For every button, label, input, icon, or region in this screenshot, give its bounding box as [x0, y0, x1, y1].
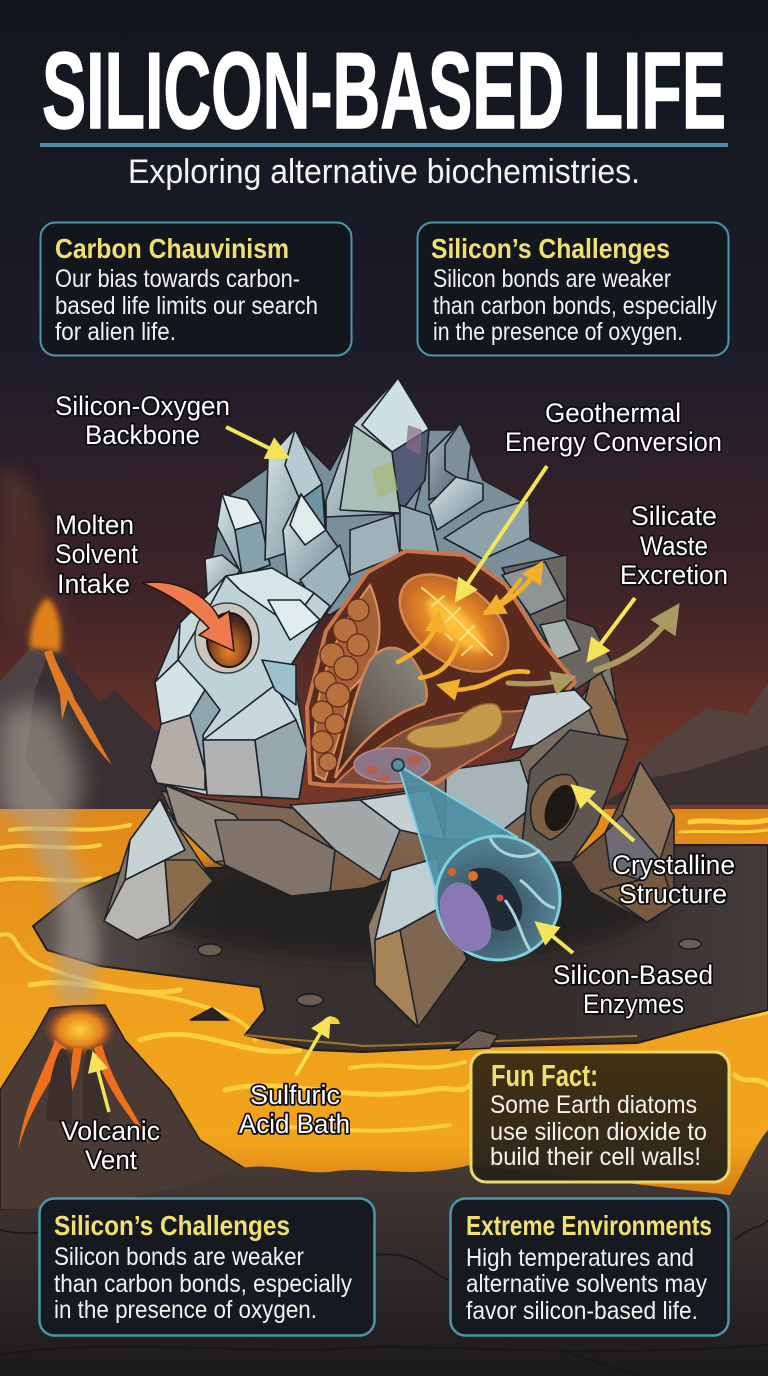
label: Silicon-Based Enzymes: Silicon-Based: [553, 960, 713, 990]
label: Sulfuric Acid Bath: Sulfuric: [250, 1080, 340, 1110]
panel: Fun Fact: Fun Fact:: [491, 1058, 598, 1093]
organ: dark cavity and grey sphere: [335, 648, 427, 778]
front centre leg: [368, 858, 467, 1027]
label: Geothermal Energy Conversion: Geothermal: [545, 398, 681, 428]
panel: Extreme Environments: High temperatures and: [466, 1244, 694, 1272]
label: Molten Solvent Intake: [55, 510, 138, 599]
label: Molten Solvent Intake: Molten: [55, 510, 134, 540]
crystal: front left: [283, 494, 340, 585]
island shadow under creature: [140, 850, 660, 960]
zoom callout pointer: [392, 759, 517, 888]
panel: Extreme Environments: alternative solvents may: [466, 1270, 707, 1298]
arrow: to mitochondrion: [458, 466, 547, 598]
panel: Extreme Environments: favor silicon-based life.: [466, 1297, 698, 1325]
panel: Silicon's Challenges (bottom): Silicon bonds are weaker: [54, 1243, 304, 1271]
organ: lower tissue: [335, 705, 552, 786]
crystal: shoulder right: [444, 500, 530, 559]
arrow: to crystalline structure: [575, 788, 634, 841]
leg: back right: [571, 762, 674, 922]
dark rock island under creature: [33, 845, 768, 1052]
label: Geothermal Energy Conversion: Energy Conversion: [505, 427, 722, 457]
panel: Silicon's Challenges (bottom): in the presence of oxygen.: [54, 1296, 317, 1324]
panel: Carbon Chauvinism: based life limits our search: [55, 292, 318, 320]
crystal mass filler: [207, 385, 613, 690]
label: Crystalline Structure: Crystalline: [612, 850, 735, 880]
background: dark sky: [0, 0, 768, 830]
foreground rock ground: [0, 1130, 768, 1376]
distant erupting volcano and mountains: [0, 598, 768, 809]
lava lake: [0, 809, 768, 1200]
lava streaks: [0, 820, 768, 1131]
label: Silicate Waste Excretion: Silicate: [631, 501, 717, 531]
label: Silicon-Oxygen Backbone: Silicon-Oxygen: [55, 391, 230, 421]
panel: Carbon Chauvinism: [40, 222, 352, 356]
label: Silicon-Oxygen Backbone: Backbone: [85, 420, 200, 450]
label: Silicon-Based Enzymes: [553, 960, 713, 1019]
label: Molten Solvent Intake: Solvent: [55, 539, 138, 569]
organ: glowing mitochondrion: [382, 555, 526, 691]
label: Crystalline Structure: [612, 850, 735, 909]
crystal spikes: [205, 378, 530, 615]
lower body rock: [161, 656, 628, 896]
creature: [104, 378, 674, 1027]
arrow: to enzymes: [539, 925, 573, 953]
island edge highlight: [245, 1035, 637, 1046]
arrow: to waste pore: [590, 598, 635, 658]
arrow: to vent: [94, 1056, 109, 1112]
title underline: [40, 143, 728, 147]
arrow: to intake: [142, 582, 234, 651]
intake ring opening: [195, 603, 259, 673]
crystal: small left: [205, 555, 240, 600]
crystal: tall left: [265, 429, 326, 560]
foreground small volcano: [0, 1004, 300, 1210]
rock strata: [0, 1200, 768, 1376]
small ground rocks: [190, 939, 701, 1050]
label: Volcanic Vent: Vent: [85, 1145, 137, 1175]
panel: Silicon's Challenges (top): [418, 222, 728, 356]
organ: yellow bean: [406, 704, 502, 748]
panel: Fun Fact: [471, 1052, 729, 1182]
panel: Silicon's Challenges (bottom): [40, 1198, 374, 1336]
leg: front left: [104, 799, 213, 940]
crystal: large central: [326, 378, 429, 517]
label: Silicate Waste Excretion: Waste: [640, 531, 708, 561]
panel: Silicon's Challenges (top): than carbon bonds, especially: [433, 292, 717, 320]
label: Sulfuric Acid Bath: [239, 1080, 350, 1139]
panel: Silicon's Challenges (bottom): Silicon’s Challenges: [54, 1210, 290, 1241]
panel: Carbon Chauvinism: Carbon Chauvinism: [55, 233, 289, 264]
crystal: left: [217, 494, 270, 575]
label: Volcanic Vent: Volcanic: [61, 1116, 160, 1146]
organ: segmented tissue: [311, 585, 380, 780]
label: Silicate Waste Excretion: [620, 501, 728, 590]
label: Volcanic Vent: [61, 1116, 160, 1175]
label: Silicon-Oxygen Backbone: [55, 391, 230, 450]
upper rocks behind cutaway: [502, 555, 613, 690]
acid bath droplet: [322, 1016, 340, 1024]
arrow: to backbone: [226, 427, 285, 456]
panel: Extreme Environments: [450, 1198, 728, 1336]
arrow: to acid bath: [296, 1020, 328, 1075]
label: Silicate Waste Excretion: Excretion: [620, 560, 728, 590]
panel: Extreme Environments: Extreme Environments: [466, 1210, 712, 1241]
label: Molten Solvent Intake: Intake: [57, 569, 130, 599]
head crystal mass: [150, 568, 330, 799]
label: Silicon-Based Enzymes: Enzymes: [583, 989, 684, 1019]
panel: Fun Fact: use silicon dioxide to: [490, 1118, 707, 1146]
subtitle: Exploring alternative biochemistries.: [128, 153, 640, 191]
cutaway interior: [307, 551, 575, 787]
distant smoke: [0, 469, 66, 650]
panel: Fun Fact: build their cell walls!: [490, 1143, 701, 1171]
label: Geothermal Energy Conversion: [505, 398, 722, 457]
volcano smoke plume: [0, 703, 98, 1005]
panel: Silicon's Challenges (top): Silicon bonds are weaker: [433, 265, 671, 293]
internal energy flow arrows: [398, 566, 540, 690]
crystal: right low: [429, 477, 483, 530]
panel: Silicon's Challenges (top): Silicon’s Challenges: [431, 233, 670, 264]
shoulder crystal below cutaway: [510, 690, 592, 750]
panel: Carbon Chauvinism: for alien life.: [55, 318, 176, 346]
label: Sulfuric Acid Bath: Acid Bath: [239, 1109, 350, 1139]
crystal: right rear: [429, 423, 471, 500]
waste excretion arrows: [508, 610, 675, 684]
enzyme magnification circle: [436, 836, 560, 960]
panel: Silicon's Challenges (bottom): than carbon bonds, especially: [54, 1270, 352, 1298]
panel: Fun Fact: Some Earth diatoms: [490, 1091, 697, 1119]
label: Crystalline Structure: Structure: [619, 879, 727, 909]
panel: Carbon Chauvinism: Our bias towards carbon-: [55, 265, 300, 293]
panel: Silicon's Challenges (top): in the presence of oxygen.: [433, 318, 683, 346]
